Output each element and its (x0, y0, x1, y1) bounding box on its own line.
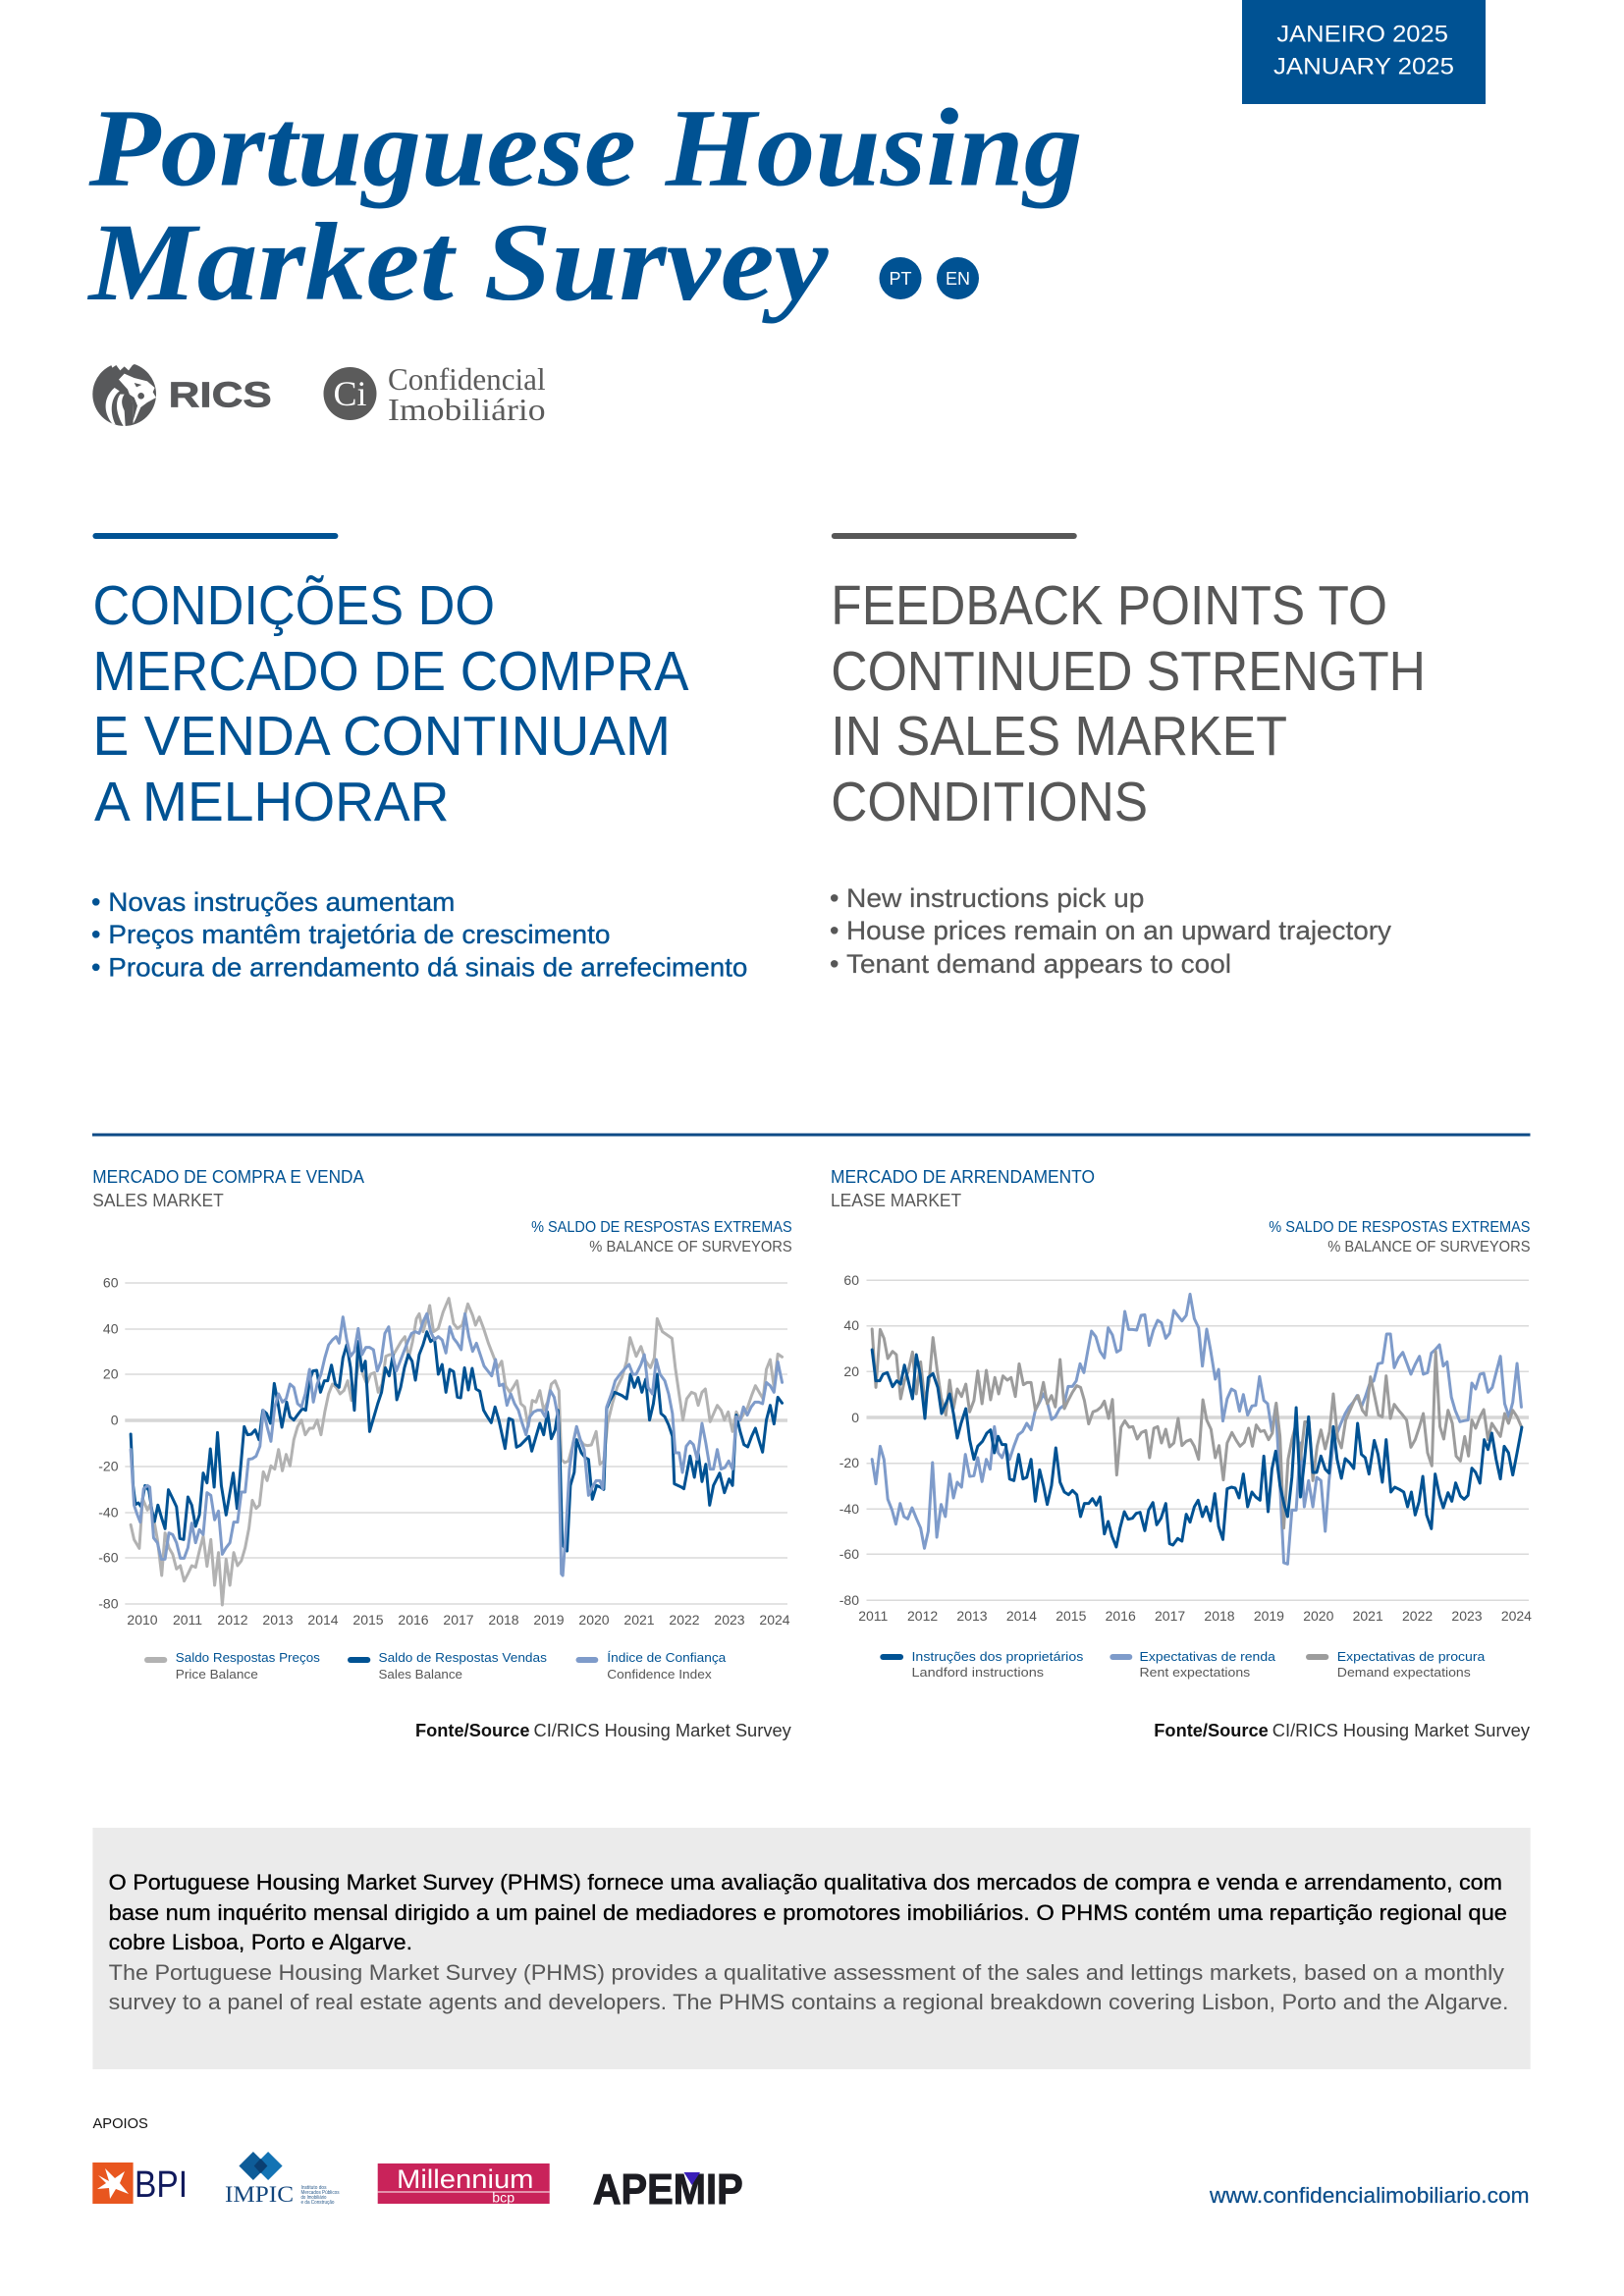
description: English: The Portuguese Housing Market Survey (PHMS) provides a qualitative assessment of the sales and lettings markets, based on a monthly (109, 1960, 1504, 1985)
bullet list: Portuguese: Novas instruções aumentam (108, 887, 455, 917)
legend: sales market: Saldo Respostas Preços (176, 1650, 320, 1665)
line chart: sales market: 0 (111, 1412, 119, 1427)
line chart: lease market: -40 (839, 1501, 859, 1517)
line chart: lease market: -20 (839, 1455, 859, 1470)
logo: Confidencial Imobiliário (324, 361, 546, 427)
line chart: sales market: 2013 (262, 1612, 294, 1628)
heading: Portuguese: MERCADO DE COMPRA (92, 640, 689, 703)
axis caption: sales: % SALDO DE RESPOSTAS EXTREMAS (531, 1219, 792, 1236)
logo: Millennium bcp: Millennium (397, 2164, 534, 2194)
legend: sales market: Índice de Confiança (607, 1650, 727, 1665)
heading: Portuguese (92, 574, 689, 833)
heading: English: CONDITIONS (831, 771, 1148, 833)
date banner: JANEIRO 2025 (1276, 22, 1448, 48)
logo: APEMIP: APEMIP (593, 2165, 743, 2214)
legend: lease market (880, 1649, 1486, 1680)
legend: lease market: Expectativas de procura (1337, 1649, 1486, 1664)
chart heading: lease: MERCADO DE ARRENDAMENTO (831, 1167, 1095, 1187)
panel: Portuguese headline (91, 533, 747, 982)
description: Portuguese (109, 1870, 1507, 1954)
bullet list: Portuguese: Procura de arrendamento dá sinais de arrefecimento (108, 952, 747, 982)
line chart: lease market: 2014 (1006, 1608, 1037, 1624)
axis caption: sales (531, 1219, 792, 1255)
bullet list: English: House prices remain on an upward trajectory (846, 916, 1392, 945)
chart heading: sales: SALES MARKET (92, 1191, 224, 1210)
language badge: PT (880, 257, 921, 299)
line chart: lease market: 2024 (1501, 1608, 1532, 1624)
legend: sales market: Sales Balance (379, 1667, 462, 1682)
line chart: lease market: 2013 (956, 1608, 988, 1624)
panel: lease market chart (831, 1167, 1532, 1740)
logo: Millennium bcp: bcp (492, 2189, 514, 2205)
logo: BPI: BPI (135, 2164, 188, 2206)
line chart: lease market: 2019 (1254, 1608, 1284, 1624)
bullet list: Portuguese: • (91, 887, 100, 917)
legend: sales market: Confidence Index (607, 1667, 712, 1682)
legend: lease market: Expectativas de renda (1139, 1649, 1276, 1664)
chart heading: sales: MERCADO DE COMPRA E VENDA (92, 1167, 364, 1187)
panel: English headline (830, 533, 1426, 979)
source note: sales: CI/RICS Housing Market Survey (534, 1721, 791, 1740)
language badge: EN: EN (946, 269, 970, 289)
line chart: sales market: 2024 (759, 1612, 790, 1628)
line chart: lease market: -60 (839, 1546, 859, 1562)
chart heading: sales (92, 1167, 364, 1210)
bullet list: English: • (830, 916, 839, 945)
line chart: lease market: 60 (843, 1272, 859, 1288)
legend: lease market: Instruções dos proprietários (911, 1649, 1084, 1664)
line chart: lease market: 2020 (1303, 1608, 1334, 1624)
description: Portuguese: O Portuguese Housing Market Survey (PHMS) fornece uma avaliação qualitativa dos mercados de compra e venda e arrendamento, com (109, 1870, 1502, 1895)
source note: lease: Fonte/Source (1154, 1721, 1269, 1740)
source note: lease (1154, 1721, 1530, 1740)
line chart: sales market: 2018 (488, 1612, 519, 1628)
line chart: lease market: 0 (851, 1410, 859, 1425)
logo: Confidencial Imobiliário: Ci (333, 374, 367, 413)
legend: sales market: Price Balance (176, 1667, 258, 1682)
line chart: sales market: 2020 (578, 1612, 610, 1628)
logo: IMPIC: Mercados Públicos (300, 2190, 340, 2196)
line chart: sales market: 2019 (533, 1612, 565, 1628)
logo: RICS (92, 359, 272, 426)
line chart: lease market: 2016 (1106, 1608, 1136, 1624)
axis caption: lease: % SALDO DE RESPOSTAS EXTREMAS (1269, 1219, 1530, 1236)
line chart: sales market: 2022 (669, 1612, 700, 1628)
line chart: lease market: 2018 (1204, 1608, 1235, 1624)
bullet list: English: New instructions pick up (846, 883, 1144, 913)
language badge: EN (937, 257, 979, 299)
heading: English (831, 574, 1426, 833)
chart heading: lease (831, 1167, 1095, 1210)
panel: about the survey (92, 1828, 1531, 2069)
chart heading: lease: LEASE MARKET (831, 1191, 961, 1210)
heading: English: IN SALES MARKET (831, 705, 1287, 768)
axis caption: sales: % BALANCE OF SURVEYORS (589, 1239, 792, 1255)
logo: IMPIC: e da Construção (300, 2200, 334, 2206)
line chart: lease market: 2012 (907, 1608, 938, 1624)
line chart: sales market: 2010 (127, 1612, 158, 1628)
line chart: lease market: 2021 (1353, 1608, 1383, 1624)
line chart: sales market: -20 (98, 1459, 119, 1474)
heading: Portuguese: CONDIÇÕES DO (92, 574, 495, 637)
line chart: lease market: -80 (839, 1592, 859, 1608)
line chart: sales market: 40 (103, 1321, 119, 1337)
source note: sales: Fonte/Source (415, 1721, 530, 1740)
bullet list: Portuguese: Preços mantêm trajetória de crescimento (108, 920, 611, 949)
logo: RICS: RICS (169, 374, 272, 414)
logo: Confidencial Imobiliário: Imobiliário (388, 392, 546, 427)
date banner (1242, 0, 1486, 104)
logo: IMPIC (225, 2152, 340, 2207)
title: Portuguese Housing (87, 86, 1082, 209)
axis caption: lease: % BALANCE OF SURVEYORS (1327, 1239, 1530, 1255)
logo: IMPIC: Instituto dos (300, 2185, 327, 2191)
panel: sales market chart (92, 1167, 792, 1740)
line chart: sales market: 60 (103, 1274, 119, 1290)
logo: BPI (92, 2163, 188, 2206)
line chart: sales market: 2015 (352, 1612, 384, 1628)
legend: sales market: Saldo de Respostas Vendas (379, 1650, 547, 1665)
legend: lease market: Demand expectations (1337, 1665, 1471, 1680)
heading: English: FEEDBACK POINTS TO (831, 574, 1387, 637)
legend: lease market: Rent expectations (1139, 1665, 1251, 1680)
line chart: sales market: 2016 (398, 1612, 429, 1628)
line chart: lease market: 2023 (1451, 1608, 1483, 1624)
legend: sales market (144, 1650, 727, 1682)
description: Portuguese: cobre Lisboa, Porto e Algarve. (109, 1930, 412, 1954)
line chart: lease market: 40 (843, 1317, 859, 1333)
legend: lease market: Landford instructions (911, 1665, 1045, 1680)
bullet list: English (830, 883, 1392, 979)
line chart: sales market: -60 (98, 1549, 119, 1565)
bullet list: Portuguese (91, 887, 747, 982)
supporters label: APOIOS (92, 2115, 148, 2132)
line chart: sales market: -80 (98, 1596, 119, 1612)
date banner: JANUARY 2025 (1273, 54, 1454, 80)
logo: IMPIC: IMPIC (225, 2182, 294, 2207)
line chart: sales market: 2021 (623, 1612, 655, 1628)
line chart: lease market: 2011 (858, 1608, 889, 1624)
heading: Portuguese: E VENDA CONTINUAM (92, 705, 671, 768)
description: English: survey to a panel of real estate agents and developers. The PHMS contains a regional breakdown covering Lisbon, Porto and the Algarve. (109, 1990, 1509, 2014)
language badge: PT: PT (889, 269, 912, 289)
line chart: sales market (98, 1274, 790, 1628)
line chart: lease market: 2022 (1402, 1608, 1433, 1624)
description: English (109, 1960, 1509, 2014)
axis caption: lease (1269, 1219, 1530, 1255)
logo: Confidencial Imobiliário: Confidencial (388, 361, 546, 397)
source note: sales (415, 1721, 791, 1740)
bullet list: English: • (830, 883, 839, 913)
source note: lease: CI/RICS Housing Market Survey (1272, 1721, 1530, 1740)
line chart: sales market: -40 (98, 1504, 119, 1520)
bullet list: English: Tenant demand appears to cool (846, 949, 1231, 979)
bullet list: English: • (830, 949, 839, 979)
heading: Portuguese: A MELHORAR (94, 771, 450, 833)
line chart: sales market: 2014 (307, 1612, 339, 1628)
line chart: sales market: 20 (103, 1366, 119, 1382)
line chart: sales market: 2023 (714, 1612, 745, 1628)
title: Market Survey (86, 201, 829, 324)
description: Portuguese: base num inquérito mensal dirigido a um painel de mediadores e promotores imobiliários. O PHMS contém uma repartição regional que (109, 1900, 1507, 1925)
logo: IMPIC: do Imobiliário (300, 2195, 326, 2201)
title (86, 86, 1083, 324)
logo: Millennium bcp (378, 2163, 550, 2205)
line chart: lease market: 20 (843, 1363, 859, 1379)
heading: English: CONTINUED STRENGTH (831, 640, 1426, 703)
line chart: sales market: 2011 (173, 1612, 202, 1628)
bullet list: Portuguese: • (91, 920, 100, 949)
website: www.confidencialimobiliario.com (1209, 2183, 1530, 2208)
bullet list: Portuguese: • (91, 952, 100, 982)
line chart: sales market: 2017 (443, 1612, 474, 1628)
line chart: sales market: 2012 (217, 1612, 248, 1628)
line chart: lease market: 2015 (1056, 1608, 1087, 1624)
line chart: lease market: 2017 (1155, 1608, 1185, 1624)
line chart: lease market (839, 1272, 1532, 1624)
